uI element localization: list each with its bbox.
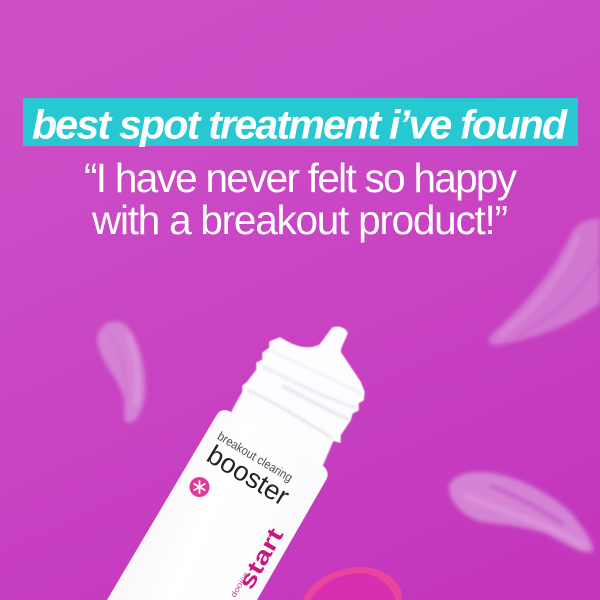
testimonial quote bbox=[84, 155, 518, 243]
icon: pink asterisk dot bbox=[190, 477, 210, 497]
label: breakout clearing: breakout clearing bbox=[215, 429, 295, 485]
thread shading bbox=[248, 350, 362, 438]
label: start: start bbox=[233, 523, 289, 594]
gel smear: lower right bbox=[449, 472, 593, 552]
banner bbox=[23, 98, 578, 148]
product tube bbox=[107, 327, 364, 600]
gel smear: left bbox=[97, 322, 145, 423]
testimonial quote: “I have never felt so happy bbox=[84, 155, 518, 201]
testimonial quote: with a breakout product!” bbox=[91, 197, 508, 243]
gel smear: upper right bbox=[489, 218, 600, 345]
tube neck and threads bbox=[228, 327, 364, 475]
label: small brand text: dooice bbox=[229, 570, 251, 599]
pink cap bbox=[303, 567, 402, 600]
banner heading: best spot treatment i’ve found bbox=[32, 102, 568, 148]
label: booster: booster bbox=[202, 439, 295, 511]
tube body bbox=[107, 410, 328, 600]
